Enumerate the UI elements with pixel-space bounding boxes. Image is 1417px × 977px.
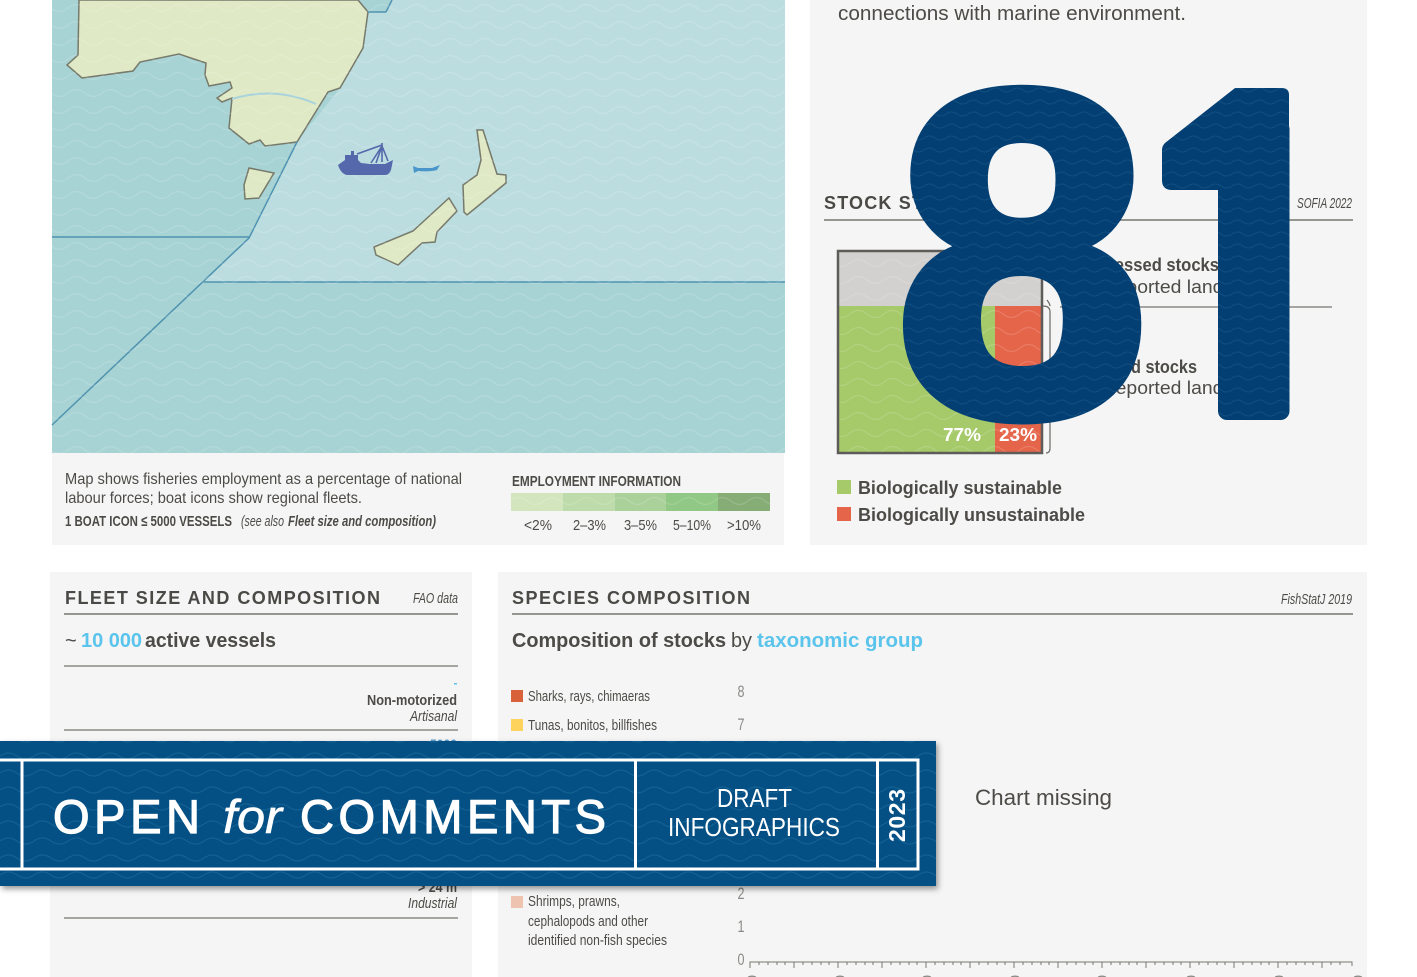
legend: taxonomic groups: cephalopods and other bbox=[528, 913, 648, 930]
chart axis: y labels: 8 bbox=[738, 682, 744, 701]
page number 81 bbox=[902, 84, 1290, 424]
subheading: composition of stocks bbox=[512, 630, 923, 652]
heading: fleet size and composition: FLEET SIZE AND COMPOSITION bbox=[65, 588, 380, 608]
chart: stock status stacked bar bbox=[838, 251, 1050, 453]
legend: employment information: >10% bbox=[727, 517, 761, 534]
row: non-motorized artisanal bbox=[367, 683, 458, 725]
chart bracket bbox=[1043, 300, 1050, 453]
legend: employment information bbox=[511, 473, 770, 534]
legend: taxonomic groups: identified non-fish species bbox=[528, 932, 667, 949]
legend: taxonomic groups bbox=[511, 688, 667, 949]
legend: employment information: 3–5% bbox=[624, 517, 657, 534]
label: assessed stocks: Assessed stocks bbox=[1065, 357, 1197, 377]
map: New Zealand south island bbox=[374, 198, 457, 265]
chart axis: x labels bbox=[744, 975, 1367, 977]
map: Tasmania bbox=[244, 168, 274, 199]
stat: active vessels: 10 000 bbox=[81, 630, 142, 652]
banner: open for comments bbox=[0, 741, 936, 886]
legend: taxonomic groups: Sharks, rays, chimaeras bbox=[528, 688, 650, 705]
legend: taxonomic groups: Tunas, bonitos, billfishes bbox=[528, 717, 657, 734]
heading: species composition: SPECIES COMPOSITION bbox=[512, 588, 750, 608]
banner subtitle bbox=[668, 783, 840, 842]
banner title: COMMENTS bbox=[300, 790, 606, 843]
row: industrial bbox=[408, 879, 458, 912]
source: FishStatJ 2019: FishStatJ 2019 bbox=[1281, 591, 1352, 608]
legend: employment information: <2% bbox=[524, 517, 552, 534]
stat: active vessels bbox=[65, 630, 276, 652]
chart placeholder: Chart missing bbox=[975, 785, 1112, 810]
source: FAO data: FAO data bbox=[413, 590, 458, 607]
legend: employment information: 5–10% bbox=[673, 517, 711, 534]
label: unassessed stocks bbox=[1065, 255, 1259, 297]
legend: biological sustainability: Biologically sustainable bbox=[858, 478, 1062, 498]
legend: employment information: 2–3% bbox=[573, 517, 606, 534]
subheading: composition of stocks: by bbox=[731, 630, 752, 652]
page number 81: 1 bbox=[1155, 6, 1335, 502]
panel: species composition bbox=[498, 572, 1367, 977]
banner title: OPEN bbox=[53, 790, 200, 843]
legend: biological sustainability: Biologically unsustainable bbox=[858, 505, 1085, 525]
chart axis: y labels: 1 bbox=[738, 917, 744, 936]
row: non-motorized artisanal: Artisanal bbox=[409, 708, 458, 725]
chart axis: y labels: 0 bbox=[738, 950, 744, 969]
legend: taxonomic groups: Shrimps, prawns, bbox=[528, 893, 620, 910]
subheading: composition of stocks: taxonomic group bbox=[757, 630, 923, 652]
text: intro fragment: connections with marine environment. bbox=[838, 3, 1186, 25]
icon: small artisanal boat bbox=[413, 165, 440, 173]
panel: map caption bbox=[52, 453, 784, 545]
panel: fisheries employment map bbox=[52, 0, 785, 453]
map: region boundaries bbox=[52, 0, 785, 425]
map description text: labour forces; boat icons show regional fleets. bbox=[65, 490, 362, 507]
legend: employment information: EMPLOYMENT INFORMATION bbox=[512, 473, 681, 490]
map description text: Map shows fisheries employment as a percentage of national bbox=[65, 471, 462, 488]
map: river bbox=[232, 94, 316, 104]
map: Australia landmass bbox=[67, 0, 368, 146]
banner title: for bbox=[223, 790, 285, 843]
label: assessed stocks: % of reported landings bbox=[1065, 378, 1259, 398]
boat icon note bbox=[65, 513, 436, 530]
row: non-motorized artisanal: Non-motorized bbox=[367, 692, 457, 709]
chart axis: x ticks bbox=[750, 962, 1352, 968]
icon: fishing vessel bbox=[338, 143, 393, 175]
row: motorized vessel count: 5000 bbox=[430, 736, 457, 752]
value label 23%: 23% bbox=[999, 425, 1037, 445]
panel: fleet size and composition bbox=[50, 572, 472, 977]
map description text bbox=[65, 471, 462, 507]
boat icon note: 1 BOAT ICON ≤ 5000 VESSELS bbox=[65, 513, 232, 530]
chart axis: y labels: 7 bbox=[738, 715, 744, 734]
boat icon note: Fleet size and composition) bbox=[288, 513, 436, 530]
value label 77%: 77% bbox=[943, 425, 981, 445]
banner title bbox=[53, 790, 606, 843]
chart axis: y labels: 2 bbox=[738, 884, 744, 903]
banner year: 2023 bbox=[884, 789, 910, 842]
panel: stock status bbox=[810, 0, 1367, 545]
heading: stock status: STOCK STATUS bbox=[824, 193, 974, 213]
label: unassessed stocks: Unassessed stocks bbox=[1065, 255, 1219, 275]
banner subtitle: INFOGRAPHICS bbox=[668, 812, 840, 842]
map: New Zealand north island bbox=[463, 130, 506, 215]
stat: active vessels: ~ bbox=[65, 630, 77, 652]
page number 81: 8 bbox=[895, 0, 1148, 511]
subheading: composition of stocks: Composition of stocks bbox=[512, 630, 726, 652]
source: SOFIA 2022: SOFIA 2022 bbox=[1297, 195, 1352, 212]
chart axis: y labels bbox=[738, 682, 744, 969]
row: industrial: > 24 m bbox=[418, 879, 457, 896]
row: industrial: Industrial bbox=[408, 895, 458, 912]
banner subtitle: DRAFT bbox=[717, 783, 792, 813]
label: unassessed stocks: % of reported landings bbox=[1065, 277, 1259, 297]
stat: active vessels: active vessels bbox=[145, 630, 276, 652]
label: assessed stocks bbox=[1065, 357, 1259, 398]
boat icon note: (see also bbox=[241, 513, 284, 530]
legend: biological sustainability bbox=[837, 478, 1085, 525]
